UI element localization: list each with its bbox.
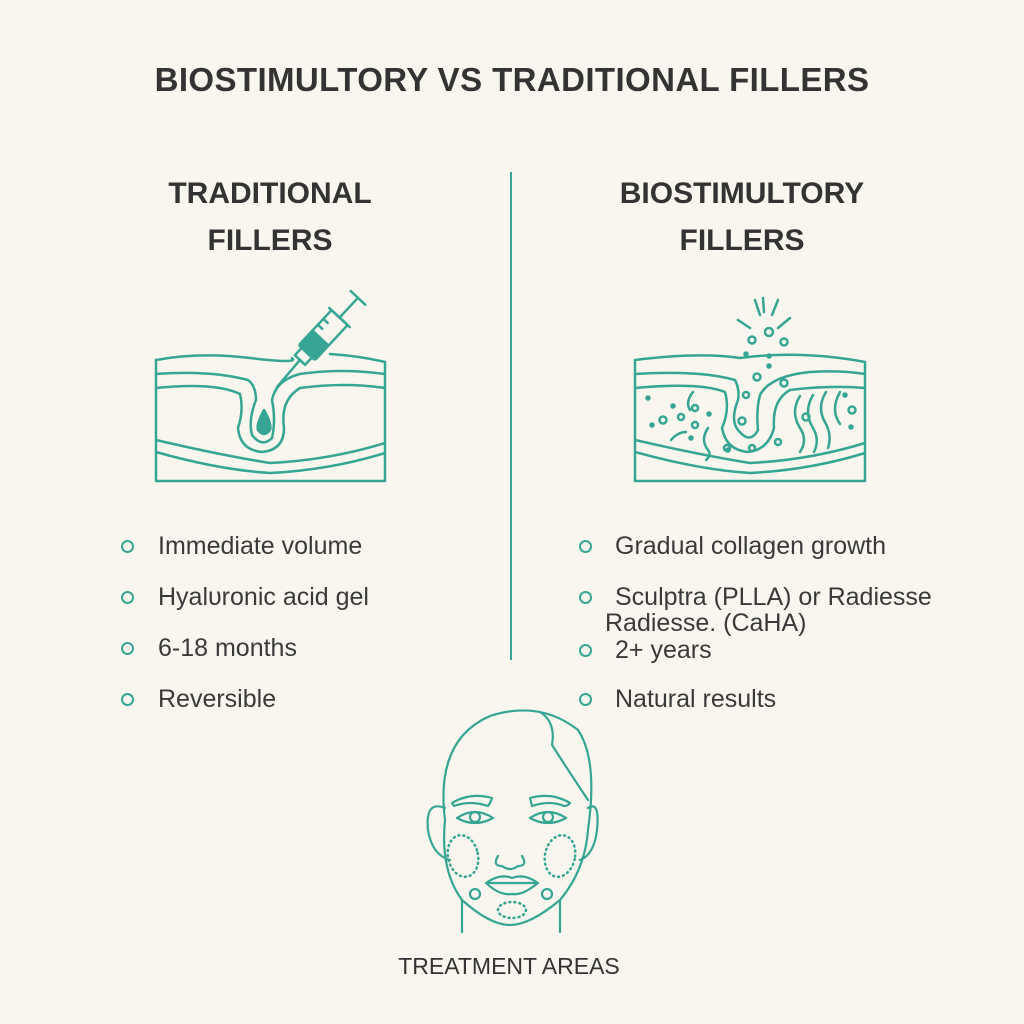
heading: biostimultory fillers bbox=[620, 177, 864, 257]
caption: treatment areas: TREATMENT AREAS bbox=[398, 953, 620, 979]
heading: biostimultory fillers: FILLERS bbox=[680, 224, 804, 257]
bullets: traditional: Immediate volume bbox=[158, 532, 362, 560]
bullets: biostimulatory: Natural results bbox=[615, 685, 776, 713]
bullets: biostimulatory: Radiesse. (CaHA) bbox=[605, 609, 806, 637]
bullets: biostimulatory bbox=[579, 532, 932, 713]
divider bbox=[510, 172, 512, 660]
bullets: biostimulatory: 2+ years bbox=[615, 636, 712, 664]
bullets: traditional: Reversible bbox=[158, 685, 276, 713]
bullets: traditional: 6-18 months bbox=[158, 634, 297, 662]
heading: traditional fillers: FILLERS bbox=[208, 224, 332, 257]
bullets: biostimulatory: Gradual collagen growth bbox=[615, 532, 886, 560]
heading: traditional fillers bbox=[168, 177, 372, 257]
bullets: biostimulatory: Sculptra (PLLA) or Radiesse bbox=[615, 583, 932, 611]
title: BIOSTIMULTORY VS TRADITIONAL FILLERS bbox=[155, 61, 869, 98]
heading: biostimultory fillers: BIOSTIMULTORY bbox=[620, 177, 864, 210]
bullets: traditional: Hyalυronic acid gel bbox=[158, 583, 369, 611]
bullets: traditional bbox=[121, 532, 369, 713]
heading: traditional fillers: TRADITIONAL bbox=[168, 177, 372, 210]
